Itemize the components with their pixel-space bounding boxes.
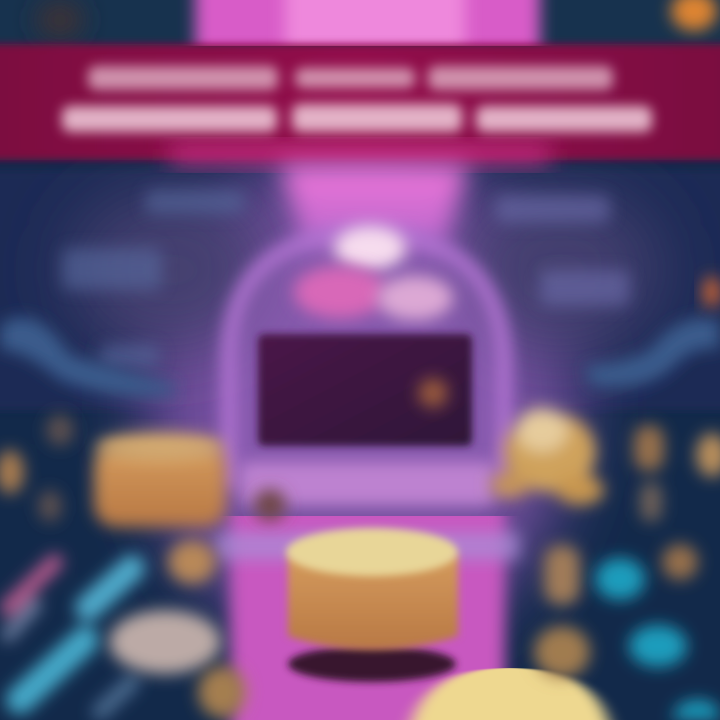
cyan tool (88, 568, 132, 608)
small snacks right side (534, 425, 720, 678)
title banner (0, 44, 720, 164)
icon: orange sun top right (671, 0, 717, 31)
central cake (286, 528, 458, 682)
top strip with pink light beam (0, 0, 720, 46)
left faint text blocks (62, 190, 245, 367)
bottom-left plate (109, 610, 221, 674)
dome highlight (334, 226, 406, 270)
lavender band below card (240, 462, 495, 506)
bottom-left utensils (8, 562, 132, 712)
pink brush (8, 562, 55, 608)
title text (illegible in reference) line 1 (88, 66, 613, 90)
icon: left blue wave (0, 317, 175, 396)
right pastry cluster (490, 408, 604, 505)
pink pedestal column (215, 516, 520, 720)
small pastries left of centre (168, 489, 286, 584)
pink contents (294, 266, 386, 318)
dark central card (258, 334, 472, 446)
title text (illegible in reference) line 2 (62, 104, 652, 132)
icon: orange seal on card (418, 378, 448, 408)
bottom-left pastry (198, 666, 246, 718)
small snacks left side (0, 414, 74, 522)
icon: right blue wave (585, 318, 720, 387)
right faint text blocks (495, 195, 630, 306)
cyan blobs right side (595, 558, 720, 720)
left cake (94, 433, 226, 527)
bottom yellow cake (412, 668, 608, 720)
central glass dome (228, 226, 505, 490)
pink beam below banner (280, 165, 468, 245)
icon: orange dot right (703, 276, 720, 308)
